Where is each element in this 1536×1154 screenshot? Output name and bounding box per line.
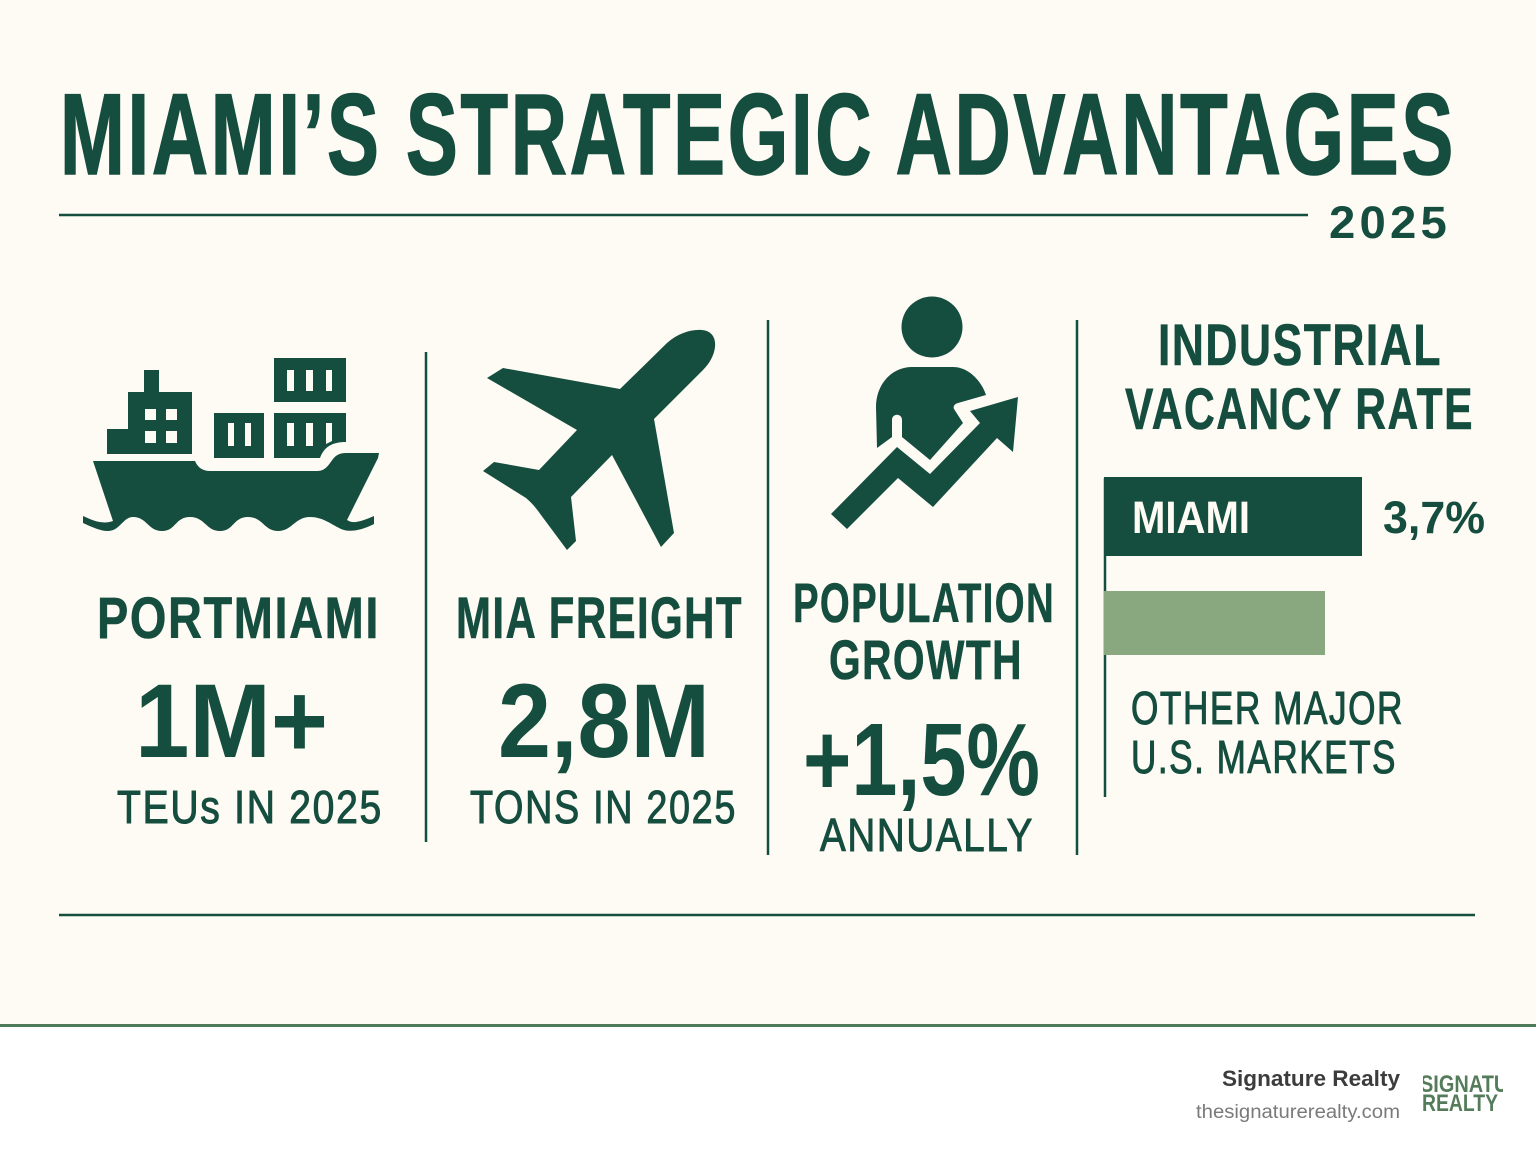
bar label: other major U.S. markets: OTHER MAJOR bbox=[1131, 682, 1404, 734]
heading: PortMiami: PORTMIAMI bbox=[97, 586, 380, 651]
footer brand name: Signature Realty bbox=[1222, 1066, 1401, 1091]
bar label: other major U.S. markets: U.S. MARKETS bbox=[1131, 731, 1397, 783]
value: 3,7%: 3,7% bbox=[1383, 492, 1485, 543]
footer logo bbox=[1420, 1071, 1536, 1117]
icon: container ship bbox=[83, 358, 379, 531]
heading: Industrial vacancy rate: INDUSTRIAL bbox=[1158, 313, 1442, 378]
panel: Population growth: GROWTH bbox=[829, 628, 1023, 691]
bar label: Miami: MIAMI bbox=[1132, 492, 1250, 543]
panel: PortMiami bbox=[83, 358, 383, 833]
stat: 1M+: 1M+ bbox=[135, 663, 328, 780]
icon: person with rising arrow bbox=[831, 296, 1018, 529]
year label: 2025 bbox=[1329, 197, 1451, 248]
stat: +1,5%: +1,5% bbox=[803, 702, 1040, 817]
caption: TEUs: TEUs IN 2025 bbox=[117, 781, 383, 833]
heading: Population growth: POPULATION bbox=[793, 571, 1055, 634]
heading: MIA Freight: MIA FREIGHT bbox=[456, 586, 743, 651]
stat: 2,8M: 2,8M bbox=[498, 663, 710, 780]
panel: Industrial vacancy rate bbox=[1104, 313, 1485, 797]
footer logo: REALTY bbox=[1422, 1090, 1498, 1117]
icon: airplane bbox=[483, 330, 715, 550]
bar: other major markets bbox=[1104, 591, 1325, 655]
panel: MIA Freight bbox=[456, 330, 743, 833]
bar label: other major U.S. markets bbox=[1131, 682, 1404, 783]
caption: tons: TONS IN 2025 bbox=[470, 781, 737, 833]
footer bbox=[0, 1024, 1536, 1154]
bar: Miami bbox=[1104, 477, 1362, 556]
panel: Population growth bbox=[793, 296, 1055, 861]
caption: annually: ANNUALLY bbox=[820, 809, 1034, 861]
footer website: thesignaturerealty.com bbox=[1196, 1102, 1400, 1123]
